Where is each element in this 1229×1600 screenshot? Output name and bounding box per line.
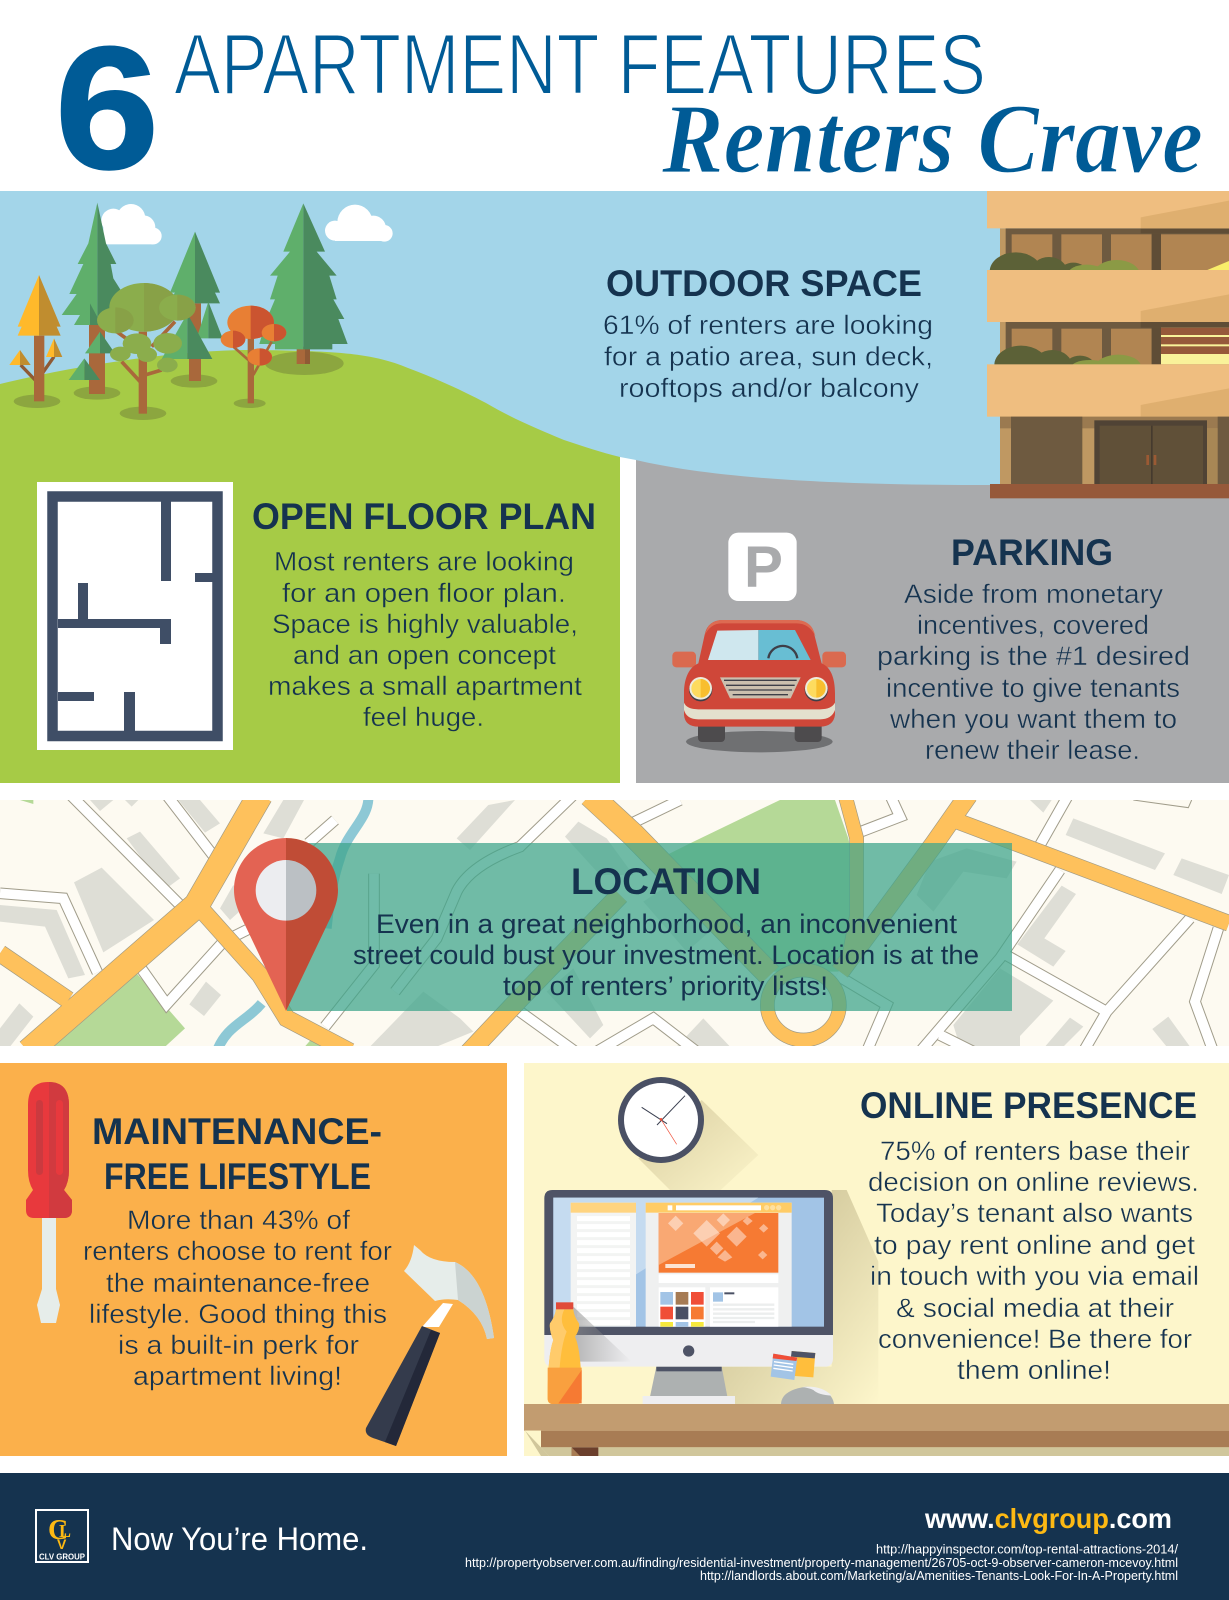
icon: clv group logo [36,1510,88,1562]
icon: apartment building [987,191,1229,498]
clock shadow [638,1100,758,1198]
source links: http://landlords.about.com/Marketing/a/Amenities-Tenants-Look-For-In-A-Property.html [700,1569,1178,1583]
title [55,10,1203,205]
text: parking body: incentive to give tenants [886,673,1180,703]
panel: parking background [636,460,1229,783]
map minor roads [0,795,1218,1055]
heading: location: LOCATION [571,861,761,902]
source links: http://propertyobserver.com.au/finding/residential-investment/property-management/26705-oct-9-observer-cameron-mcevoy.html [465,1556,1178,1570]
monitor shadow [722,1190,878,1404]
title line: apartment features: APARTMENT FEATURES [174,17,986,113]
text: open floor plan body: Most renters are looking [274,546,574,576]
tagline: Now You’re Home. [111,1521,368,1557]
text: online presence body: & social media at their [896,1293,1174,1323]
heading: outdoor space: OUTDOOR SPACE [606,263,922,304]
map main roads [0,795,1229,1055]
text: parking body: Aside from monetary [904,579,1164,609]
panel: outdoor space sky [0,191,1229,491]
text: open floor plan body: makes a small apartment [268,671,583,701]
icon: left pine [62,203,121,394]
icon: clv group logo: L [59,1521,71,1541]
icon: middle pine [162,232,223,381]
text: location body: street could bust your investment. Location is at the [353,940,979,970]
text: location body [353,909,979,1001]
balcony slabs [987,191,1229,417]
icon: floor plan [37,482,233,750]
text: outdoor space body: rooftops and/or balcony [619,373,920,403]
text: parking body: renew their lease. [925,735,1140,765]
heading: maintenance-free lifestyle: MAINTENANCE- [92,1111,382,1152]
text: online presence body: in touch with you via email [870,1261,1199,1291]
text: maintenance body: apartment living! [133,1361,342,1391]
panel: footer [0,1473,1229,1600]
title numeral 6: 6 [55,10,159,205]
heading: maintenance-free lifestyle [92,1111,382,1197]
heading: parking: PARKING [951,532,1113,573]
icon: mouse [781,1387,834,1404]
ground floor and door [1000,417,1229,484]
icon: orange tree [221,306,286,403]
text: online presence body: decision on online reviews. [868,1167,1199,1197]
icon: parking sign and car [672,533,846,752]
text: open floor plan body [268,546,583,732]
icon: map pin [234,838,338,1011]
text: online presence body: them online! [957,1355,1111,1385]
panel: location map [0,795,1229,1055]
panel: open floor plan hill [0,350,620,783]
website url: www.clvgroup.com [924,1503,1172,1534]
windows middle floor [994,322,1229,384]
text: maintenance body: renters choose to rent for [83,1236,392,1266]
icon: clouds [101,204,393,244]
text: outdoor space body: for a patio area, sun deck, [604,342,933,372]
bottle shadow [573,1307,632,1362]
panel: location overlay [287,843,1012,1011]
icon: trees and clouds [9,203,393,420]
text: maintenance body: the maintenance-free [106,1268,370,1298]
source links [465,1542,1179,1583]
icon: clock [618,1077,704,1163]
text: outdoor space body: 61% of renters are looking [603,310,933,340]
icon: parking sign: P [744,535,783,600]
map blocks [0,800,1229,1047]
icon: round olive tree [97,283,196,414]
text: online presence body: convenience! Be there for [878,1324,1192,1354]
icon: desktop monitor [544,1190,833,1404]
text: online presence body: Today’s tenant also wants [876,1198,1193,1228]
text: maintenance body: More than 43% of [127,1205,351,1235]
text: parking body [877,579,1190,765]
icon: screwdriver [26,1082,72,1323]
heading: maintenance-free lifestyle: FREE LIFESTYLE [104,1156,371,1197]
text: open floor plan body: and an open concept [293,640,557,670]
heading: open floor plan: OPEN FLOOR PLAN [252,496,596,537]
panel: online presence [524,1063,1229,1456]
heading: online presence: ONLINE PRESENCE [860,1085,1197,1126]
panel: maintenance [0,1063,507,1456]
text: online presence body: to pay rent online and get [874,1230,1196,1260]
icon: large pine [259,203,348,364]
text: open floor plan body: Space is highly valuable, [272,609,578,639]
icon: clv group logo: V [57,1536,67,1552]
text: maintenance body: is a built-in perk for [118,1330,359,1360]
icon: yellow tree [9,275,62,401]
windows upper floor [990,228,1229,291]
icon: clv group logo: CLV GROUP [39,1552,85,1562]
text: parking body: parking is the #1 desired [877,641,1190,671]
text: online presence body [868,1136,1199,1385]
text: maintenance body: lifestyle. Good thing this [89,1299,387,1329]
icon: sticky notes [771,1351,815,1380]
desk [524,1404,1229,1456]
text: maintenance body [83,1205,392,1391]
text: location body: Even in a great neighborhood, an inconvenient [376,909,958,939]
map river [217,795,368,1052]
text: online presence body: 75% of renters base their [880,1136,1190,1166]
map parks [20,800,863,1048]
text: outdoor space body [603,310,933,403]
icon: juice bottle [548,1302,582,1404]
icon: clv group logo: C [48,1515,68,1546]
text: parking body: incentives, covered [917,610,1149,640]
icon: car [672,620,846,752]
source links: http://happyinspector.com/top-rental-attractions-2014/ [876,1542,1179,1556]
text: open floor plan body: feel huge. [363,702,484,732]
icon: hammer [366,1245,494,1446]
icon: ground shadows [14,352,344,420]
icon: parking sign [728,533,797,601]
text: location body: top of renters’ priority lists! [503,971,828,1001]
text: open floor plan body: for an open floor plan. [282,578,566,608]
illustration: desk scene [524,1077,1229,1456]
text: parking body: when you want them to [889,704,1177,734]
